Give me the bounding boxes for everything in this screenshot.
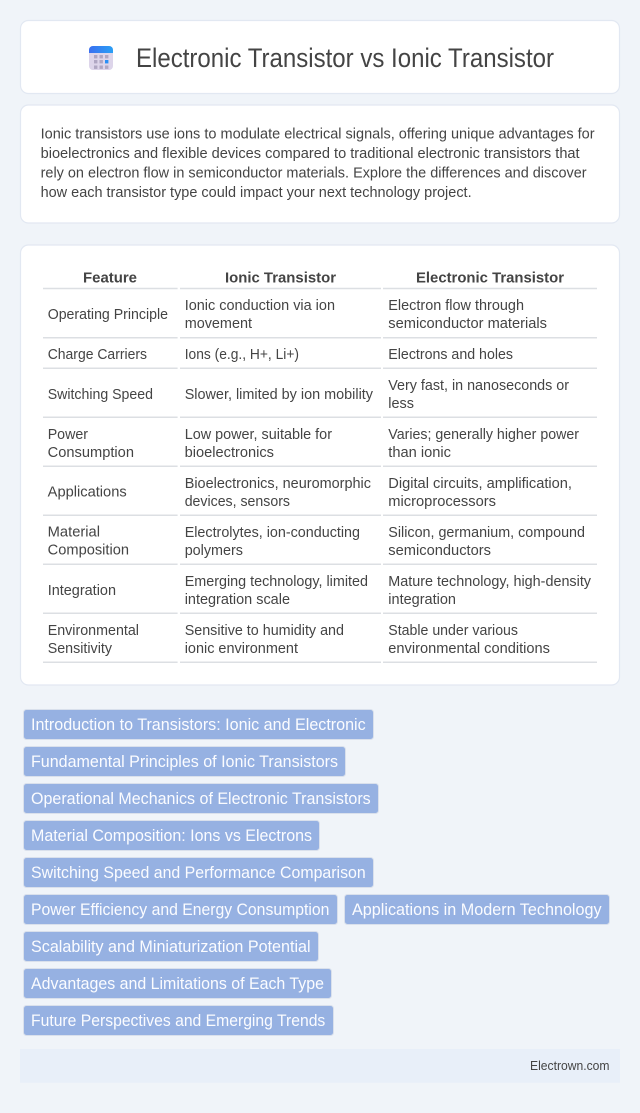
tag: introduction (24, 710, 374, 740)
tag: applications (344, 894, 610, 924)
row: switching speed: Very fast, in nanoseconds or (388, 378, 569, 394)
text block: introduction paragraph: rely on electron flow in semiconductor materials. Explore the differences and discover (41, 165, 587, 182)
text block: introduction paragraph: Ionic transistors use ions to modulate electrical signals, offering unique advantages for (41, 126, 595, 143)
row: environmental sensitivity (48, 623, 550, 657)
panel: comparison table (20, 245, 620, 685)
row: operating principle: Ionic conduction via ion (185, 298, 335, 314)
row: applications: Applications (48, 485, 127, 501)
row: material composition: Silicon, germanium, compound (388, 525, 585, 541)
row: integration: Mature technology, high-density (388, 574, 592, 590)
tag: introduction: Introduction to Transistors: Ionic and Electronic (31, 716, 366, 734)
row: switching speed: Switching Speed (48, 387, 153, 403)
row: power consumption (48, 427, 579, 461)
tag: scalability: Scalability and Miniaturization Potential (31, 938, 311, 956)
row: material composition: Composition (48, 543, 129, 559)
row: operating principle: semiconductor materials (388, 316, 547, 332)
row: charge carriers: Charge Carriers (48, 347, 147, 363)
row: environmental sensitivity: environmental conditions (388, 641, 550, 657)
tag: applications: Applications in Modern Technology (352, 901, 602, 919)
tag: operational mechanics: Operational Mechanics of Electronic Transistors (31, 790, 371, 808)
tag: fundamental principles: Fundamental Principles of Ionic Transistors (31, 753, 338, 771)
row: power consumption: Varies; generally higher power (388, 427, 579, 443)
row: charge carriers: Electrons and holes (388, 347, 513, 363)
table header row: Ionic Transistor (225, 270, 336, 287)
row: environmental sensitivity: Sensitivity (48, 641, 113, 657)
icon: calendar grid (89, 46, 113, 70)
row: switching speed: less (388, 396, 414, 412)
row: applications: Bioelectronics, neuromorphic (185, 476, 371, 492)
tag: power efficiency: Power Efficiency and Energy Consumption (31, 901, 329, 919)
text block: introduction paragraph (41, 126, 595, 201)
row: integration: integration (388, 592, 456, 608)
tag: scalability (24, 932, 318, 962)
row: operating principle: Operating Principle (48, 307, 168, 323)
tag list: table of contents (24, 710, 610, 1036)
panel: introduction (20, 105, 620, 223)
tag: material composition: Material Composition: Ions vs Electrons (31, 827, 312, 845)
tag: material composition (24, 820, 320, 850)
row: material composition: semiconductors (388, 543, 491, 559)
row: applications: microprocessors (388, 494, 496, 510)
row: charge carriers (48, 347, 513, 363)
tag: advantages: Advantages and Limitations of Each Type (31, 975, 324, 993)
row: operating principle: Electron flow through (388, 298, 524, 314)
row: environmental sensitivity: Sensitive to humidity and (185, 623, 344, 639)
row: integration: Emerging technology, limited (185, 574, 368, 590)
text block: introduction paragraph: how each transistor type could impact your next technology project. (41, 184, 472, 201)
row: power consumption: Consumption (48, 445, 134, 461)
row: integration: Integration (48, 583, 116, 599)
row: switching speed (48, 378, 569, 412)
table header row (83, 270, 564, 287)
row: material composition: Electrolytes, ion-conducting (185, 525, 360, 541)
row: environmental sensitivity: Environmental (48, 623, 139, 639)
row: power consumption: Low power, suitable for (185, 427, 332, 443)
tag: fundamental principles (24, 746, 346, 776)
row: power consumption: than ionic (388, 445, 451, 461)
row: integration (48, 574, 592, 608)
tag: operational mechanics (24, 784, 378, 814)
title: Electronic Transistor vs Ionic Transistor (136, 43, 554, 73)
row: integration: integration scale (185, 592, 290, 608)
row: power consumption: bioelectronics (185, 445, 274, 461)
row: power consumption: Power (48, 427, 88, 443)
row: switching speed: Slower, limited by ion mobility (185, 387, 374, 403)
tag: future perspectives: Future Perspectives and Emerging Trends (31, 1012, 325, 1030)
tag: switching speed: Switching Speed and Performance Comparison (31, 864, 366, 882)
row: material composition: Material (48, 525, 100, 541)
row: charge carriers: Ions (e.g., H+, Li+) (185, 347, 299, 363)
row: environmental sensitivity: Stable under various (388, 623, 518, 639)
row: environmental sensitivity: ionic environment (185, 641, 298, 657)
tag: switching speed (24, 858, 374, 888)
table header row: Feature (83, 270, 137, 287)
tag: power efficiency (24, 894, 338, 924)
row: applications: Digital circuits, amplification, (388, 476, 572, 492)
row: material composition (48, 525, 585, 559)
row: applications: devices, sensors (185, 494, 290, 510)
row: material composition: polymers (185, 543, 243, 559)
tag: advantages (24, 968, 332, 998)
panel: header (20, 20, 620, 94)
footer credit: Electrown.com (530, 1058, 610, 1073)
table header row: Electronic Transistor (416, 270, 564, 287)
footer (20, 1049, 620, 1083)
text block: introduction paragraph: bioelectronics and flexible devices compared to traditional electronic transistors that (41, 145, 580, 162)
row: operating principle (48, 298, 547, 332)
tag: future perspectives (24, 1006, 334, 1036)
row: operating principle: movement (185, 316, 252, 332)
row: applications (48, 476, 572, 510)
